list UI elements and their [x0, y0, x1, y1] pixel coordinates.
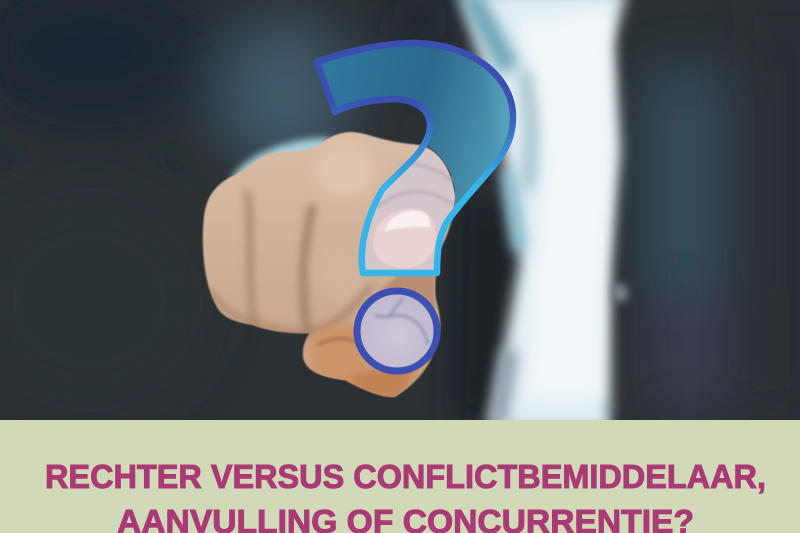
- panel: title band: [0, 420, 800, 533]
- fist: [203, 132, 455, 400]
- title: RECHTER VERSUS CONFLICTBEMIDDELAAR,: [45, 458, 766, 495]
- title: [45, 458, 766, 533]
- question mark lower fill over thumb: [362, 148, 455, 273]
- tie and shirt: [458, 0, 628, 430]
- question mark fill: top translucent blue: [317, 43, 513, 215]
- question mark dot: [357, 291, 437, 371]
- suit background: [0, 0, 800, 420]
- question mark outline: [317, 43, 513, 273]
- thumb: [373, 209, 436, 268]
- glow behind fist: [232, 138, 330, 190]
